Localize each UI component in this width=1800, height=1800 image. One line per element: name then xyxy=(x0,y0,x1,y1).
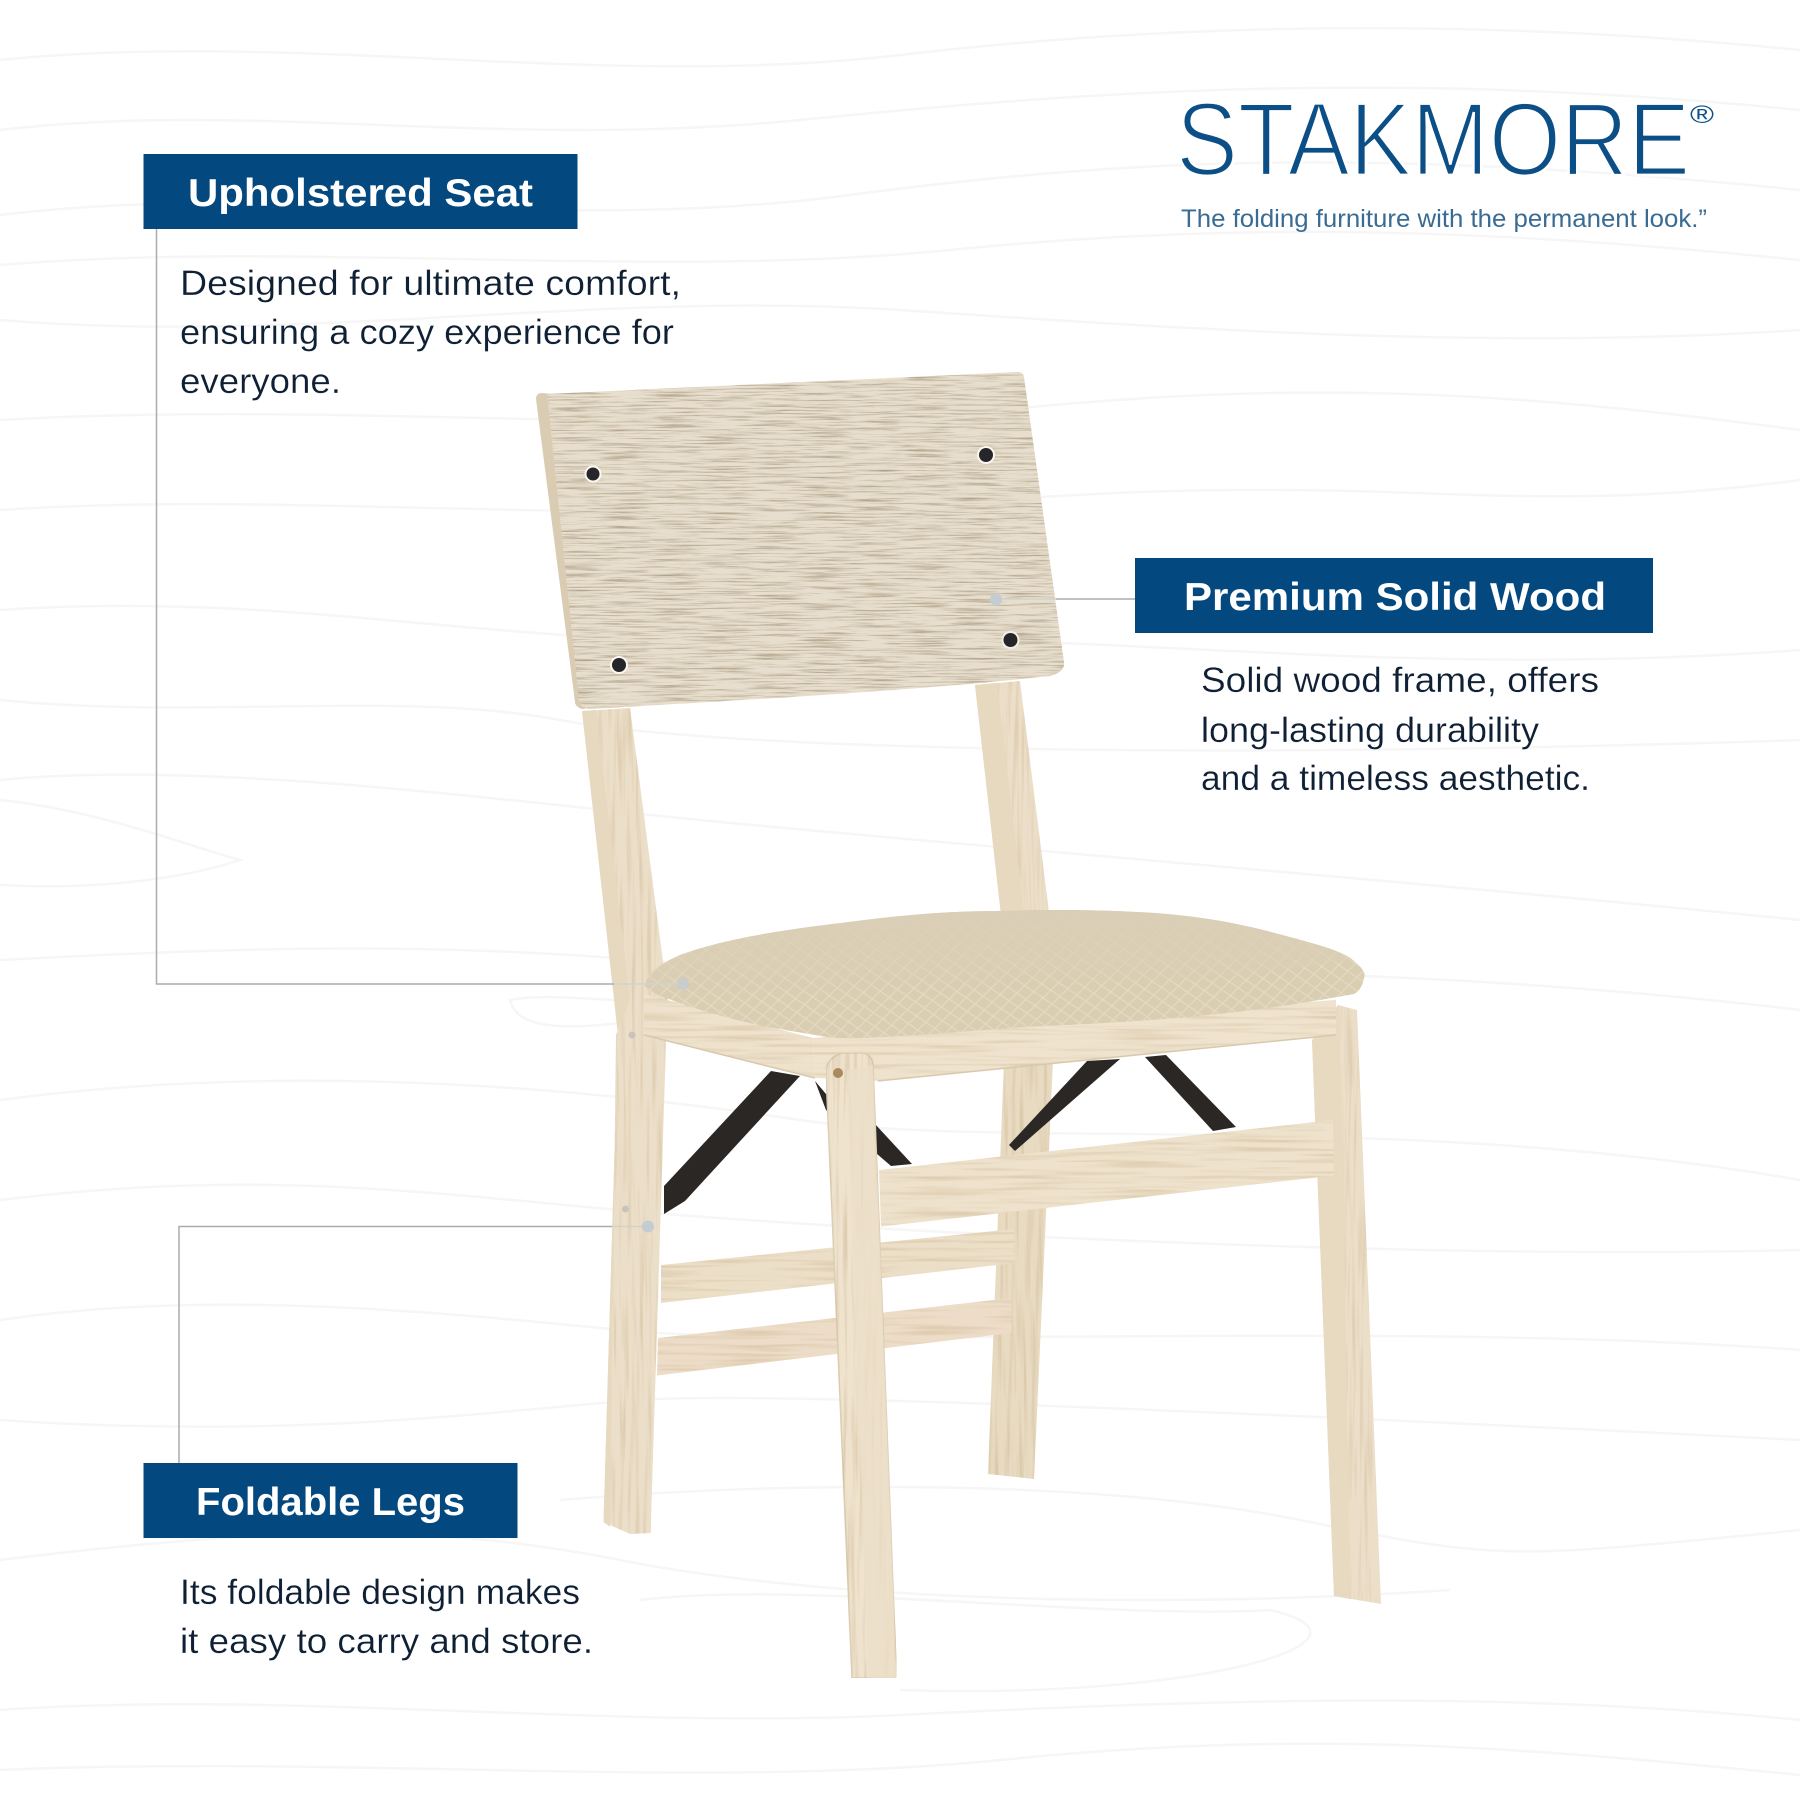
right front leg xyxy=(1312,1005,1381,1604)
heading bar: foldable legs: Foldable Legs xyxy=(196,1481,465,1524)
post screws xyxy=(622,1032,636,1212)
panel: upholstered seat xyxy=(144,154,681,401)
logo tagline: The folding furniture with the permanent look.” xyxy=(1181,205,1707,233)
leader: premium solid wood xyxy=(990,594,1135,606)
front stretcher xyxy=(879,1120,1334,1226)
body text: upholstered seat: everyone. xyxy=(180,362,341,401)
chair illustration xyxy=(536,372,1381,1678)
seat cushion xyxy=(645,910,1365,1038)
back rivets xyxy=(584,446,1020,674)
seat frame rails xyxy=(644,994,1336,1081)
logo: Stakmore xyxy=(1176,82,1715,233)
heading bar: upholstered seat: Upholstered Seat xyxy=(188,172,533,215)
body text: premium solid wood xyxy=(1201,661,1599,798)
chair backrest panel xyxy=(536,372,1064,709)
metal folding braces xyxy=(664,1055,1236,1214)
heading bar: premium solid wood xyxy=(1135,558,1653,633)
registered mark: ® xyxy=(1690,101,1715,129)
logo wordmark: STAKMORE xyxy=(1176,82,1690,198)
body text: foldable legs: Its foldable design makes xyxy=(180,1573,580,1612)
leg hinge pin xyxy=(833,1068,843,1078)
body text: foldable legs xyxy=(180,1573,593,1661)
body text: premium solid wood: long-lasting durability xyxy=(1201,711,1540,750)
heading bar: upholstered seat xyxy=(144,154,578,229)
back leg upper segment xyxy=(582,708,668,1534)
chair back right post xyxy=(975,681,1049,915)
leader: foldable legs xyxy=(179,1220,654,1463)
body text: upholstered seat xyxy=(180,264,681,401)
rear stretchers xyxy=(657,1229,1015,1376)
body text: premium solid wood: and a timeless aesthetic. xyxy=(1201,759,1590,798)
body text: foldable legs: it easy to carry and store. xyxy=(180,1622,593,1661)
body text: premium solid wood: Solid wood frame, offers xyxy=(1201,661,1599,700)
heading bar: foldable legs xyxy=(144,1463,518,1538)
panel: premium solid wood xyxy=(1135,558,1653,798)
chair back right leg xyxy=(988,1060,1053,1479)
post shading xyxy=(582,710,630,1527)
leader: upholstered seat xyxy=(156,229,689,990)
body text: upholstered seat: Designed for ultimate comfort, xyxy=(180,264,681,303)
body text: upholstered seat: ensuring a cozy experience for xyxy=(180,313,674,352)
front left leg xyxy=(826,1053,896,1678)
panel: foldable legs xyxy=(144,1463,593,1661)
heading bar: premium solid wood: Premium Solid Wood xyxy=(1184,576,1606,619)
